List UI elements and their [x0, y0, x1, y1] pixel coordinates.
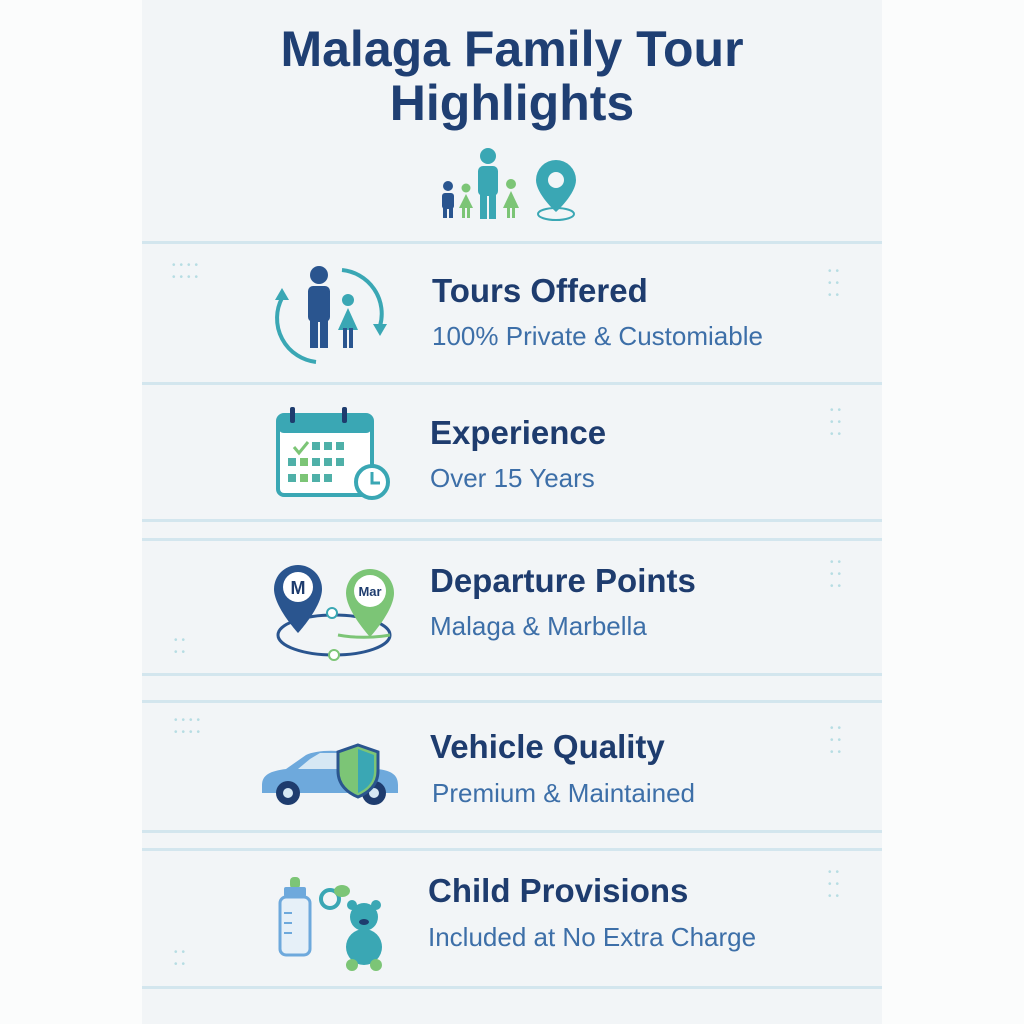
panel: experience [276, 405, 845, 500]
icon: parent and child with arrows [275, 266, 387, 364]
panel: child provisions: •• [828, 891, 843, 902]
panel: vehicle quality: •• [830, 747, 845, 758]
text: Included at No Extra Charge [428, 922, 756, 952]
panel: tours offered: •• [828, 278, 843, 289]
icon: family with pin [442, 148, 576, 221]
panel: departure points [174, 557, 845, 661]
panel: experience: •• [830, 405, 845, 416]
panel: departure points: •• [174, 635, 189, 646]
panel: tours offered: •••• [172, 260, 202, 271]
panel: vehicle quality: •••• [174, 727, 204, 738]
icon: two map pins M and Mar [274, 565, 394, 661]
panel: vehicle quality: •• [830, 723, 845, 734]
icon: bottle, pacifier, teddy [278, 877, 382, 971]
text: 100% Private & Customiable [432, 321, 763, 351]
panel: departure points: •• [830, 557, 845, 568]
panel: vehicle quality: •• [830, 735, 845, 746]
title: Highlights [390, 75, 634, 131]
icon: calendar with clock [276, 407, 390, 500]
icon: two map pins M and Mar: M [290, 578, 306, 598]
heading: Vehicle Quality: Vehicle Quality [430, 728, 665, 765]
title: Malaga Family Tour [280, 21, 744, 77]
panel: tours offered: •• [828, 266, 843, 277]
heading: Tours Offered: Tours Offered [432, 272, 648, 309]
panel: child provisions: •• [174, 959, 189, 970]
panel: child provisions: •• [828, 879, 843, 890]
panel: tours offered [172, 260, 843, 364]
panel: child provisions [174, 867, 843, 971]
icon: car with shield [262, 743, 398, 805]
heading: Departure Points: Departure Points [430, 562, 696, 599]
panel: departure points: •• [174, 647, 189, 658]
panel: vehicle quality: •••• [174, 715, 204, 726]
title [280, 21, 744, 131]
panel: tours offered: •• [828, 290, 843, 301]
panel: departure points: •• [830, 581, 845, 592]
panel: experience: •• [830, 417, 845, 428]
icon: two map pins M and Mar: Mar [358, 584, 382, 599]
panel: vehicle quality [174, 715, 845, 808]
panel: child provisions: •• [828, 867, 843, 878]
panel: child provisions: •• [174, 947, 189, 958]
panel: experience: •• [830, 429, 845, 440]
panel: tours offered: •••• [172, 272, 202, 283]
heading: Experience: Experience [430, 414, 606, 451]
text: Premium & Maintained [432, 778, 695, 808]
text: Malaga & Marbella [430, 611, 647, 641]
heading: Child Provisions: Child Provisions [428, 872, 688, 909]
text: Over 15 Years [430, 463, 595, 493]
panel: departure points: •• [830, 569, 845, 580]
